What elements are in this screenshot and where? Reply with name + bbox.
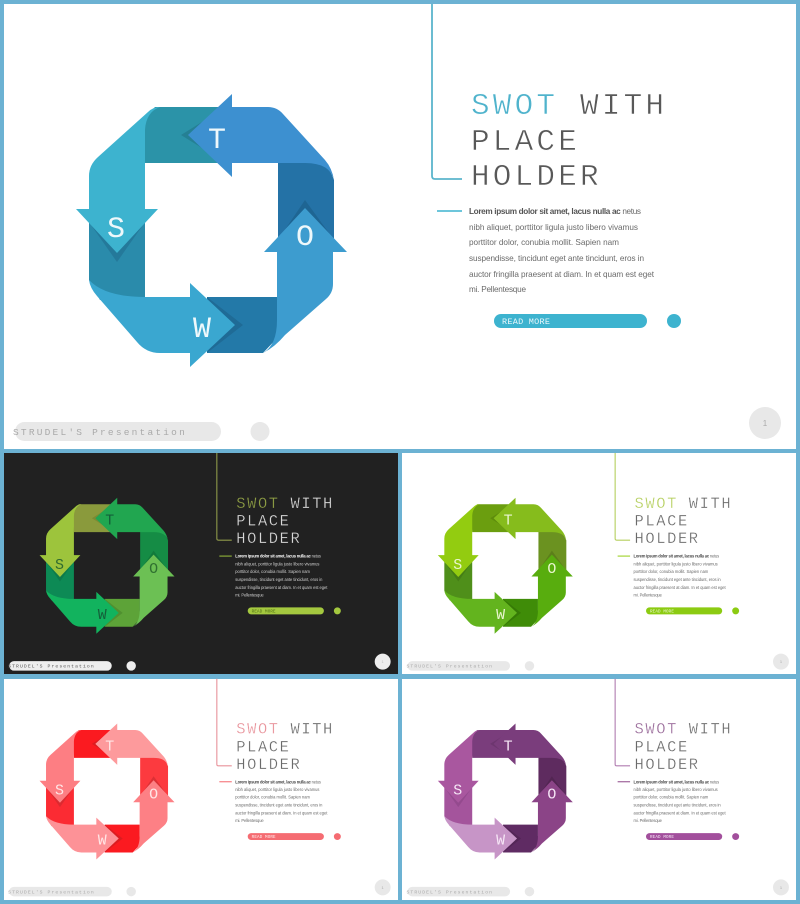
title: PLACE	[471, 125, 580, 160]
arrow: T	[494, 724, 566, 766]
body text: suspendisse, tincidunt eget ante tincidunt, eros in	[634, 803, 721, 808]
body text: porttitor dolor, conubia mollit. Sapien nam	[634, 795, 709, 800]
body text: porttitor dolor, conubia mollit. Sapien nam	[634, 569, 709, 574]
title: HOLDER	[236, 756, 301, 774]
letter O: O	[149, 562, 158, 578]
arrow: T	[95, 498, 168, 541]
letter O: O	[547, 562, 556, 578]
footer: STRUDEL'S Presentation	[8, 889, 95, 895]
footer: 1	[382, 885, 385, 890]
read more button	[248, 833, 341, 840]
arrow: T	[95, 724, 168, 766]
body text: Lorem ipsum dolor sit amet, lacus nulla ac netus	[235, 554, 321, 559]
letter S: S	[55, 784, 64, 800]
arrow: S	[438, 730, 480, 803]
body text: nibh aliquet, porttitor ligula justo libero vivamus	[634, 562, 718, 567]
panel: light green slide	[402, 453, 796, 674]
title	[236, 495, 334, 548]
body text: Lorem ipsum dolor sit amet, lacus nulla ac netus	[634, 554, 719, 559]
body text: suspendisse, tincidunt eget ante tincidunt, eros in	[235, 803, 322, 808]
title: SWOT WITH	[236, 720, 334, 738]
letter W: W	[98, 608, 107, 624]
arrow: O	[133, 780, 175, 852]
letter W: W	[193, 313, 211, 347]
body text: nibh aliquet, porttitor ligula justo libero vivamus	[235, 562, 319, 567]
footer: 1	[780, 885, 783, 890]
footer	[406, 879, 789, 896]
title	[236, 720, 334, 774]
diagram: red SWOT cycle	[40, 724, 175, 859]
diagram: green SWOT cycle	[438, 498, 573, 634]
body text: nibh aliquet, porttitor ligula justo libero vivamus	[235, 787, 319, 792]
title	[471, 89, 667, 195]
arrow: S	[438, 504, 480, 577]
read more button	[248, 607, 341, 614]
footer: 1	[763, 419, 768, 428]
letter W: W	[496, 834, 505, 850]
body text: mi. Pellentesque	[634, 818, 663, 823]
letter W: W	[98, 834, 107, 850]
arrow: W	[89, 280, 235, 367]
title: SWOT WITH	[471, 89, 667, 124]
bracket line	[217, 679, 232, 766]
footer: 1	[382, 659, 385, 664]
letter S: S	[453, 784, 462, 800]
title: SWOT WITH	[236, 495, 334, 513]
letter O: O	[547, 788, 556, 804]
title: HOLDER	[471, 160, 602, 195]
body text: auctor fringilla praesent at diam. In et quam est eget	[634, 585, 727, 590]
letter T: T	[105, 739, 114, 755]
body text: auctor fringilla praesent at diam. In et quam est eget	[235, 585, 328, 590]
read more button	[494, 314, 681, 328]
panel: purple slide	[402, 679, 796, 900]
read more button	[646, 833, 739, 840]
footer: STRUDEL'S Presentation	[406, 664, 493, 670]
title: PLACE	[635, 738, 689, 756]
letter S: S	[55, 558, 64, 574]
arrow: W	[46, 590, 119, 634]
title	[635, 720, 732, 774]
body text: porttitor dolor, conubia mollit. Sapien nam	[469, 238, 619, 247]
title: PLACE	[635, 513, 689, 531]
letter O: O	[149, 788, 158, 804]
body text: auctor fringilla praesent at diam. In et quam est eget	[235, 811, 328, 816]
letter T: T	[208, 124, 226, 158]
body text: Lorem ipsum dolor sit amet, lacus nulla ac netus	[235, 779, 321, 784]
read more button	[646, 607, 739, 614]
footer: STRUDEL'S Presentation	[8, 664, 95, 670]
body text: porttitor dolor, conubia mollit. Sapien nam	[235, 569, 311, 574]
body text: nibh aliquet, porttitor ligula justo libero vivamus	[634, 787, 718, 792]
body text	[618, 554, 727, 597]
footer	[13, 407, 781, 441]
arrow: O	[531, 555, 573, 627]
body text	[437, 207, 655, 294]
footer: STRUDEL'S Presentation	[406, 889, 493, 895]
title: PLACE	[236, 738, 291, 756]
arrow: W	[444, 816, 517, 859]
body text: mi. Pellentesque	[235, 592, 264, 597]
body text	[618, 779, 727, 823]
title: SWOT WITH	[635, 495, 732, 513]
body text: auctor fringilla praesent at diam. In et quam est eget	[634, 811, 727, 816]
read more button: READ MORE	[502, 317, 550, 327]
letter T: T	[105, 514, 114, 530]
read more button: READ MORE	[650, 835, 674, 840]
letter S: S	[107, 213, 125, 247]
title: HOLDER	[635, 530, 700, 548]
panel: dark green slide	[4, 453, 398, 674]
panel: main blue slide	[4, 4, 796, 449]
body text: suspendisse, tincidunt eget ante tincidunt, eros in	[469, 254, 644, 263]
footer	[406, 654, 789, 671]
diagram: dark green SWOT cycle	[40, 498, 175, 634]
body text: auctor fringilla praesent at diam. In et quam est eget	[469, 270, 655, 279]
body text: mi. Pellentesque	[235, 818, 264, 823]
footer	[8, 654, 391, 671]
title: PLACE	[236, 513, 291, 531]
bracket line	[615, 679, 630, 766]
arrow: O	[263, 208, 347, 353]
letter T: T	[504, 514, 513, 530]
arrow: W	[444, 590, 517, 634]
arrow: W	[46, 816, 119, 859]
read more button: READ MORE	[650, 609, 674, 614]
body text: suspendisse, tincidunt eget ante tincidunt, eros in	[235, 577, 322, 582]
arrow: S	[40, 504, 81, 577]
letter O: O	[296, 221, 314, 255]
body text: mi. Pellentesque	[634, 592, 663, 597]
footer: STRUDEL'S Presentation	[13, 427, 187, 438]
body text: mi. Pellentesque	[469, 285, 526, 294]
body text: porttitor dolor, conubia mollit. Sapien nam	[235, 795, 311, 800]
arrow: T	[188, 94, 334, 180]
diagram: blue SWOT cycle	[76, 94, 347, 367]
body text: Lorem ipsum dolor sit amet, lacus nulla ac netus	[469, 207, 641, 216]
letter S: S	[453, 558, 462, 574]
title: HOLDER	[236, 530, 301, 548]
arrow: T	[494, 498, 566, 541]
title: SWOT WITH	[635, 720, 732, 738]
title	[635, 495, 732, 548]
arrow: O	[531, 780, 573, 852]
title: HOLDER	[635, 756, 700, 774]
arrow: S	[40, 730, 81, 803]
letter W: W	[496, 608, 505, 624]
footer	[8, 879, 391, 896]
bracket line	[615, 453, 630, 540]
panel: red slide	[4, 679, 398, 900]
arrow: S	[76, 107, 160, 253]
body text: suspendisse, tincidunt eget ante tincidunt, eros in	[634, 577, 721, 582]
bracket line	[432, 4, 462, 179]
read more button: READ MORE	[252, 609, 276, 614]
arrow: O	[133, 555, 175, 627]
letter T: T	[504, 739, 513, 755]
diagram: purple SWOT cycle	[438, 724, 573, 859]
read more button: READ MORE	[252, 835, 276, 840]
body text: nibh aliquet, porttitor ligula justo libero vivamus	[469, 223, 638, 232]
bracket line	[217, 453, 232, 540]
body text	[219, 554, 328, 597]
body text: Lorem ipsum dolor sit amet, lacus nulla ac netus	[634, 779, 719, 784]
body text	[219, 779, 328, 823]
footer: 1	[780, 659, 783, 664]
